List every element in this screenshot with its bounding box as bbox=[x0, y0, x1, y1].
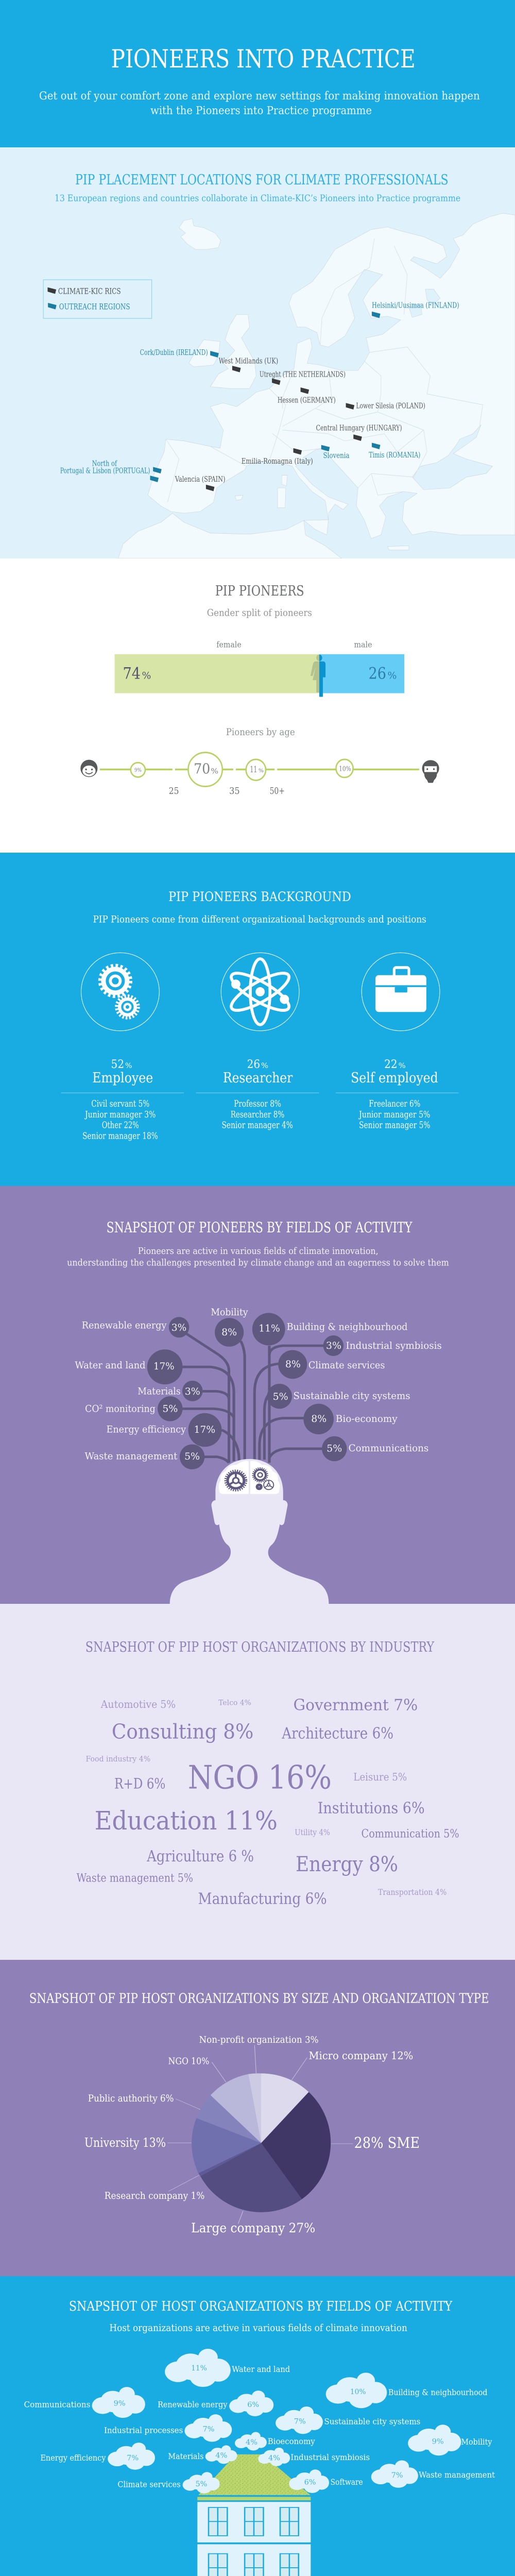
column: self employed: % bbox=[399, 1062, 406, 1070]
chart: industry word cloud: Manufacturing 6% bbox=[198, 1889, 327, 1908]
map legend bbox=[43, 280, 152, 318]
text: background subtitle: PIP Pioneers come from different organizational backgrounds and positions bbox=[93, 914, 426, 925]
icon: young face bbox=[80, 760, 97, 777]
chart: pie labels: Large company 27% bbox=[191, 2221, 315, 2235]
chart: cloud labels: Water and land bbox=[232, 2364, 290, 2374]
chart: cloud percentages: 11% bbox=[191, 2364, 207, 2372]
chart: industry word cloud: Education 11% bbox=[95, 1806, 278, 1836]
chart: industry word cloud: Waste management 5% bbox=[77, 1871, 193, 1885]
chart: cloud labels: Mobility bbox=[461, 2437, 492, 2447]
chart: cloud labels: Industrial symbiosis bbox=[290, 2452, 370, 2462]
chart: bubble percentages: 5% bbox=[184, 1451, 200, 1462]
chart: industry word cloud: Automotive 5% bbox=[100, 1699, 176, 1710]
chart: bubble percentages: 11% bbox=[259, 1323, 280, 1334]
heading: fields of activity: SNAPSHOT OF PIONEERS BY FIELDS OF ACTIVITY bbox=[107, 1219, 413, 1236]
chart: field bubbles bbox=[147, 1313, 347, 1469]
column: employee: Senior manager 18% bbox=[82, 1130, 158, 1141]
chart: gender bar: 26 bbox=[369, 664, 386, 683]
chart: pie labels: Research company 1% bbox=[105, 2190, 204, 2201]
chart: gender bar bbox=[115, 640, 404, 697]
map region labels: Timis (ROMANIA) bbox=[369, 451, 420, 460]
map region labels: Portugal & Lisbon (PORTUGAL) bbox=[60, 467, 150, 475]
chart: pie labels: Public authority 6% bbox=[88, 2093, 174, 2104]
panel: header bbox=[0, 0, 515, 147]
icon: person bbox=[311, 654, 325, 697]
map markers bbox=[150, 312, 381, 491]
chart: cloud percentages: 6% bbox=[247, 2401, 259, 2409]
chart: industry word cloud: Government 7% bbox=[294, 1696, 418, 1714]
chart: cloud labels: Sustainable city systems bbox=[324, 2417, 420, 2426]
chart: connector lines bbox=[183, 1333, 323, 1463]
chart: pie labels: 28% SME bbox=[354, 2134, 420, 2151]
chart: pie bbox=[192, 2073, 331, 2212]
chart: industry word cloud: Consulting 8% bbox=[112, 1720, 253, 1743]
chart: pie labels: Micro company 12% bbox=[308, 2050, 413, 2062]
column: employee: Junior manager 3% bbox=[84, 1109, 156, 1120]
chart: cloud labels: Materials bbox=[168, 2451, 203, 2461]
chart: pie labels: University 13% bbox=[84, 2136, 166, 2150]
chart: cloud percentages bbox=[114, 2364, 444, 2488]
chart: field labels: Energy efficiency bbox=[107, 1423, 186, 1435]
column: researcher: Researcher bbox=[223, 1070, 293, 1086]
chart: bubble percentages: 3% bbox=[326, 1340, 341, 1351]
text: fields subtitle bbox=[67, 1246, 449, 1268]
chart: age timeline: 25 bbox=[169, 786, 179, 796]
chart: bubble percentages: 5% bbox=[327, 1443, 342, 1454]
text: gender split: Gender split of pioneers bbox=[207, 608, 312, 619]
map region labels: Central Hungary (HUNGARY) bbox=[316, 424, 402, 433]
chart: pie labels: Non-profit organization 3% bbox=[199, 2035, 319, 2045]
chart: cloud labels: Software bbox=[331, 2478, 363, 2487]
heading: placement locations: PIP PLACEMENT LOCATIONS FOR CLIMATE PROFESSIONALS bbox=[75, 172, 449, 188]
chart: field labels: Sustainable city systems bbox=[294, 1390, 410, 1401]
chart: field labels: Renewable energy bbox=[82, 1319, 166, 1331]
panel: pioneers background bbox=[0, 853, 515, 1186]
chart: industry word cloud: R+D 6% bbox=[114, 1775, 165, 1792]
icon: old bearded face bbox=[422, 760, 439, 783]
column: self employed: Freelancer 6% bbox=[369, 1098, 420, 1109]
column: researcher: Professor 8% bbox=[234, 1098, 281, 1109]
panel: host organizations by fields of activity bbox=[0, 2276, 515, 2576]
chart: cloud percentages: 10% bbox=[350, 2388, 366, 2396]
chart: field labels: Industrial symbiosis bbox=[346, 1340, 442, 1351]
chart: industry word cloud: NGO 16% bbox=[188, 1759, 332, 1797]
chart: cloud percentages: 7% bbox=[127, 2454, 139, 2463]
chart: gender bar: female bbox=[216, 640, 242, 650]
chart: cloud labels bbox=[24, 2364, 495, 2489]
panel: host organizations by industry bbox=[0, 1604, 515, 1960]
column: employee: % bbox=[125, 1062, 132, 1070]
chart: cloud percentages: 4% bbox=[246, 2438, 258, 2447]
chart: cloud percentages: 7% bbox=[294, 2417, 306, 2426]
chart: cloud percentages: 9% bbox=[114, 2399, 126, 2408]
chart: bubble percentages: 8% bbox=[221, 1326, 237, 1338]
text: regions subtitle: 13 European regions and countries collaborate in Climate-KIC’s Pioneers into Practice programme bbox=[55, 193, 460, 204]
chart: bubble percentages: 5% bbox=[273, 1391, 288, 1402]
column: employee: Employee bbox=[92, 1070, 153, 1086]
column: researcher: 26 bbox=[247, 1058, 260, 1071]
chart: cloud percentages: 4% bbox=[268, 2454, 280, 2463]
panel: PIP pioneers bbox=[0, 558, 515, 853]
chart: age timeline: 35 bbox=[229, 786, 240, 796]
column: researcher: Researcher 8% bbox=[231, 1109, 284, 1120]
chart: field labels: Bio-economy bbox=[336, 1413, 398, 1425]
column: researcher bbox=[196, 1058, 319, 1130]
map region labels: Emilia-Romagna (Italy) bbox=[242, 457, 313, 466]
subtitle: Get out of your comfort zone and explore new settings for making innovation happen bbox=[39, 89, 480, 102]
column: self employed: 22 bbox=[384, 1058, 398, 1071]
chart: gender bar: % bbox=[142, 671, 151, 682]
map legend: OUTREACH REGIONS bbox=[59, 302, 130, 312]
column: self employed: Senior manager 5% bbox=[359, 1120, 430, 1130]
chart: industry word cloud: Transportation 4% bbox=[378, 1888, 447, 1897]
chart: bubble percentages: 17% bbox=[194, 1423, 215, 1435]
chart: cloud labels: Renewable energy bbox=[158, 2400, 228, 2409]
chart: age timeline: 10% bbox=[339, 765, 351, 773]
icon: house bbox=[197, 2454, 311, 2576]
icon: briefcase bbox=[362, 953, 440, 1031]
chart: industry word cloud: Energy 8% bbox=[296, 1852, 398, 1876]
heading: background: PIP PIONEERS BACKGROUND bbox=[168, 889, 351, 904]
column: researcher: % bbox=[261, 1062, 268, 1070]
icon: brain with gears bbox=[219, 1461, 280, 1494]
heading: PIP pioneers: PIP PIONEERS bbox=[215, 583, 304, 599]
icon: atom bbox=[221, 953, 299, 1031]
map legend: CLIMATE-KIC RICS bbox=[58, 287, 121, 296]
chart: bubble percentages: 8% bbox=[285, 1358, 301, 1370]
chart: cloud labels: Industrial processes bbox=[104, 2426, 183, 2435]
chart: industry word cloud: Architecture 6% bbox=[281, 1724, 393, 1742]
chart: industry word cloud bbox=[77, 1696, 459, 1908]
panel: host organizations by size and type bbox=[0, 1960, 515, 2276]
chart: gender bar: male bbox=[354, 640, 372, 650]
chart: cloud labels: Energy efficiency bbox=[40, 2453, 106, 2463]
chart: industry word cloud: Food industry 4% bbox=[85, 1755, 150, 1764]
chart: clouds bbox=[92, 2349, 461, 2494]
chart: industry word cloud: Agriculture 6 % bbox=[146, 1847, 254, 1865]
chart: cloud percentages: 6% bbox=[304, 2478, 316, 2486]
chart: field labels bbox=[75, 1307, 442, 1462]
map region labels: Cork/Dublin (IRELAND) bbox=[140, 348, 208, 357]
chart: cloud percentages: 9% bbox=[432, 2437, 444, 2446]
panel: placement map bbox=[0, 147, 515, 558]
chart: industry word cloud: Leisure 5% bbox=[353, 1770, 407, 1783]
chart: bubble percentages: 3% bbox=[185, 1386, 200, 1397]
map region labels: Lower Silesia (POLAND) bbox=[356, 402, 425, 411]
map region labels: Valencia (SPAIN) bbox=[175, 476, 226, 484]
chart: field labels: Waste management bbox=[85, 1450, 178, 1462]
chart: age timeline: % bbox=[259, 768, 264, 774]
chart: bubble percentages bbox=[153, 1321, 342, 1462]
chart: field labels: Materials bbox=[138, 1385, 181, 1397]
chart: gender bar: 74 bbox=[123, 664, 141, 683]
chart: cloud percentages: 7% bbox=[391, 2471, 403, 2480]
text: fields subtitle: Pioneers are active in various fields of climate innovation, bbox=[138, 1246, 379, 1257]
column: employee bbox=[61, 1058, 184, 1141]
chart: field labels: Water and land bbox=[75, 1360, 146, 1371]
map region labels: Slovenia bbox=[323, 451, 350, 460]
column: self employed: Junior manager 5% bbox=[358, 1109, 430, 1120]
text: fields subtitle: understanding the challenges presented by climate change and an eagerness to solve them bbox=[67, 1258, 449, 1268]
column: employee: Other 22% bbox=[102, 1120, 139, 1130]
column: employee: 52 bbox=[111, 1058, 124, 1071]
chart: field labels: CO² monitoring bbox=[85, 1403, 156, 1414]
chart: industry word cloud: Utility 4% bbox=[295, 1827, 330, 1837]
icon: head silhouette bbox=[170, 1459, 329, 1604]
chart: age timeline: 11 bbox=[250, 764, 257, 774]
chart: field labels: Building & neighbourhood bbox=[287, 1321, 407, 1333]
chart: cloud labels: Bioeconomy bbox=[268, 2437, 315, 2446]
subtitle: with the Pioneers into Practice programme bbox=[150, 104, 372, 117]
chart: field labels: Communications bbox=[349, 1442, 428, 1454]
chart: age timeline: 70 bbox=[194, 761, 210, 777]
title: PIONEERS INTO PRACTICE bbox=[111, 44, 416, 74]
chart: pie leader lines bbox=[167, 2045, 353, 2224]
map region labels: West Midlands (UK) bbox=[219, 357, 278, 366]
map region labels: North of bbox=[92, 460, 117, 468]
chart: cloud labels: Climate services bbox=[117, 2480, 181, 2489]
chart: cloud labels: Communications bbox=[24, 2400, 90, 2409]
chart: bubble percentages: 8% bbox=[311, 1413, 327, 1425]
column: employee: Civil servant 5% bbox=[91, 1098, 149, 1109]
chart: pie labels bbox=[84, 2035, 420, 2235]
map region labels: Helsinki/Uusimaa (FINLAND) bbox=[372, 301, 459, 310]
chart: bubble percentages: 5% bbox=[162, 1403, 178, 1414]
text: by age: Pioneers by age bbox=[226, 727, 295, 738]
chart: industry word cloud: Institutions 6% bbox=[318, 1799, 425, 1817]
Black Sea bbox=[412, 425, 493, 490]
map region labels bbox=[60, 301, 459, 484]
chart: cloud percentages: 7% bbox=[202, 2425, 214, 2434]
map region labels: Hessen (GERMANY) bbox=[278, 396, 336, 405]
chart: bubble percentages: 3% bbox=[171, 1321, 186, 1333]
column: self employed bbox=[336, 1058, 458, 1130]
chart: pie labels: NGO 10% bbox=[168, 2056, 209, 2066]
chart: age timeline bbox=[80, 753, 439, 796]
chart: field labels: Mobility bbox=[211, 1307, 248, 1318]
column: self employed: Self employed bbox=[351, 1070, 438, 1086]
chart: age timeline: 9% bbox=[134, 767, 142, 773]
map of Europe bbox=[118, 213, 515, 558]
panel: pioneers by fields of activity bbox=[0, 1186, 515, 1604]
icon: gears bbox=[81, 953, 159, 1031]
chart: cloud percentages: 4% bbox=[215, 2451, 227, 2460]
chart: cloud percentages: 5% bbox=[195, 2480, 207, 2488]
chart: industry word cloud: Telco 4% bbox=[218, 1699, 251, 1707]
subtitle bbox=[39, 89, 480, 117]
chart: bubble percentages: 17% bbox=[153, 1361, 175, 1372]
chart: age timeline: % bbox=[211, 768, 218, 775]
column: researcher: Senior manager 4% bbox=[221, 1120, 293, 1130]
chart: age timeline: 50+ bbox=[270, 786, 285, 796]
chart: field labels: Climate services bbox=[308, 1360, 385, 1371]
map region labels: Utreght (THE NETHERLANDS) bbox=[260, 370, 346, 379]
chart: gender bar: % bbox=[388, 671, 397, 682]
